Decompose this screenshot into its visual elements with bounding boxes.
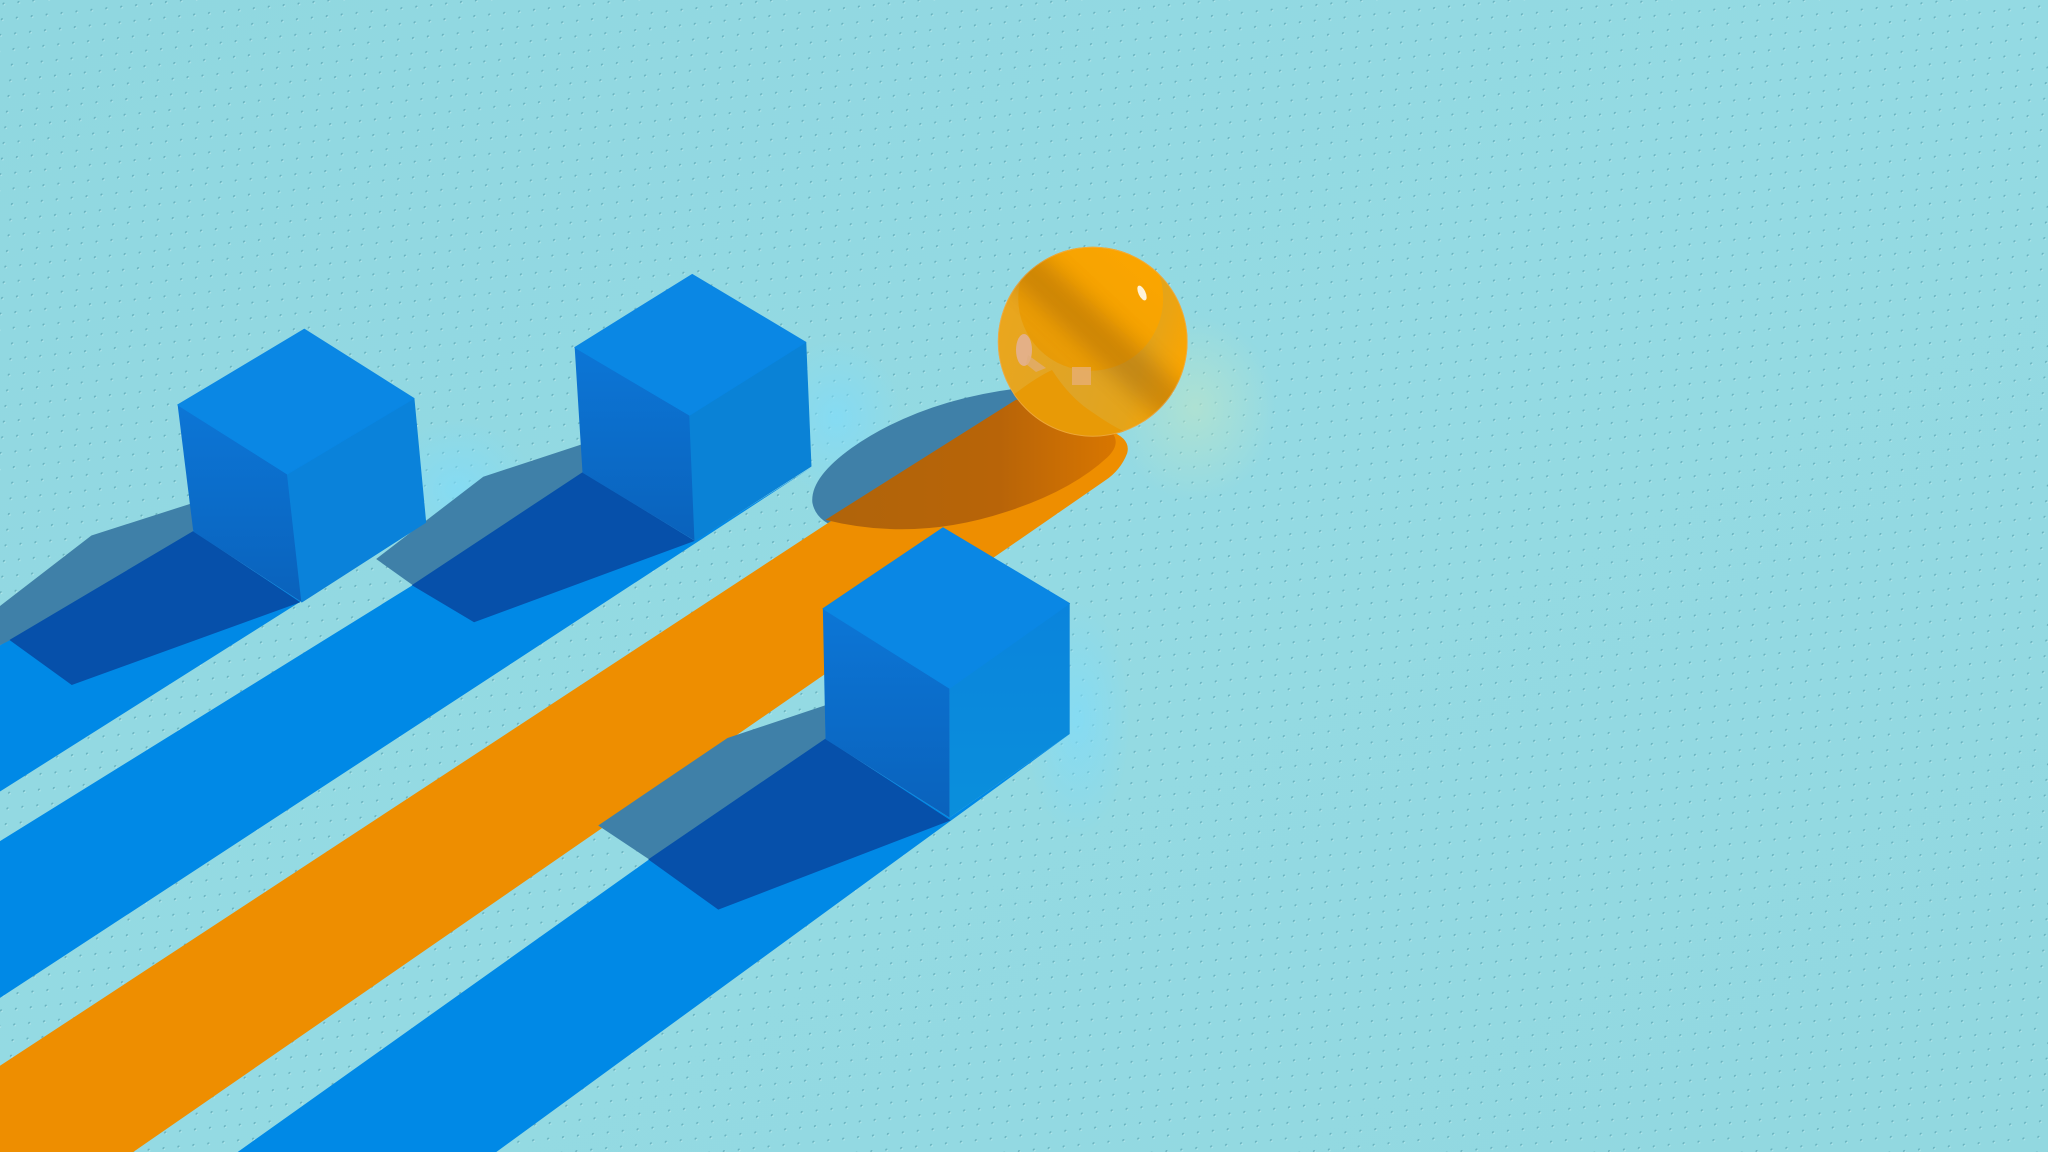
sphere highlight: [1137, 286, 1147, 300]
orange glossy sphere: [998, 246, 1188, 437]
sphere dark diagonal band: [1014, 256, 1180, 417]
sphere lower orange reflection: [1014, 370, 1124, 437]
sphere upper reflection disc: [1018, 246, 1164, 371]
cube: second: [575, 274, 811, 541]
cast shadow: third cube: [598, 705, 950, 909]
cube: first: [178, 329, 426, 602]
soft light glows on the floor: [379, 313, 1276, 836]
blue stripe: first cube: [0, 522, 426, 791]
cube: third: [823, 528, 1070, 818]
blue stripe: second cube: [0, 468, 811, 998]
cast shadow: sphere on floor: [812, 388, 1045, 529]
stripes, shadows and cubes: [0, 274, 1128, 1152]
orange stripe: [0, 402, 1128, 1152]
cast shadow: first cube: [0, 503, 299, 684]
sphere pale reflections: [1016, 334, 1091, 385]
cast shadow: second cube: [376, 444, 694, 622]
blue stripe: third cube: [238, 734, 1070, 1152]
sphere shadow on orange stripe: [825, 400, 1116, 529]
